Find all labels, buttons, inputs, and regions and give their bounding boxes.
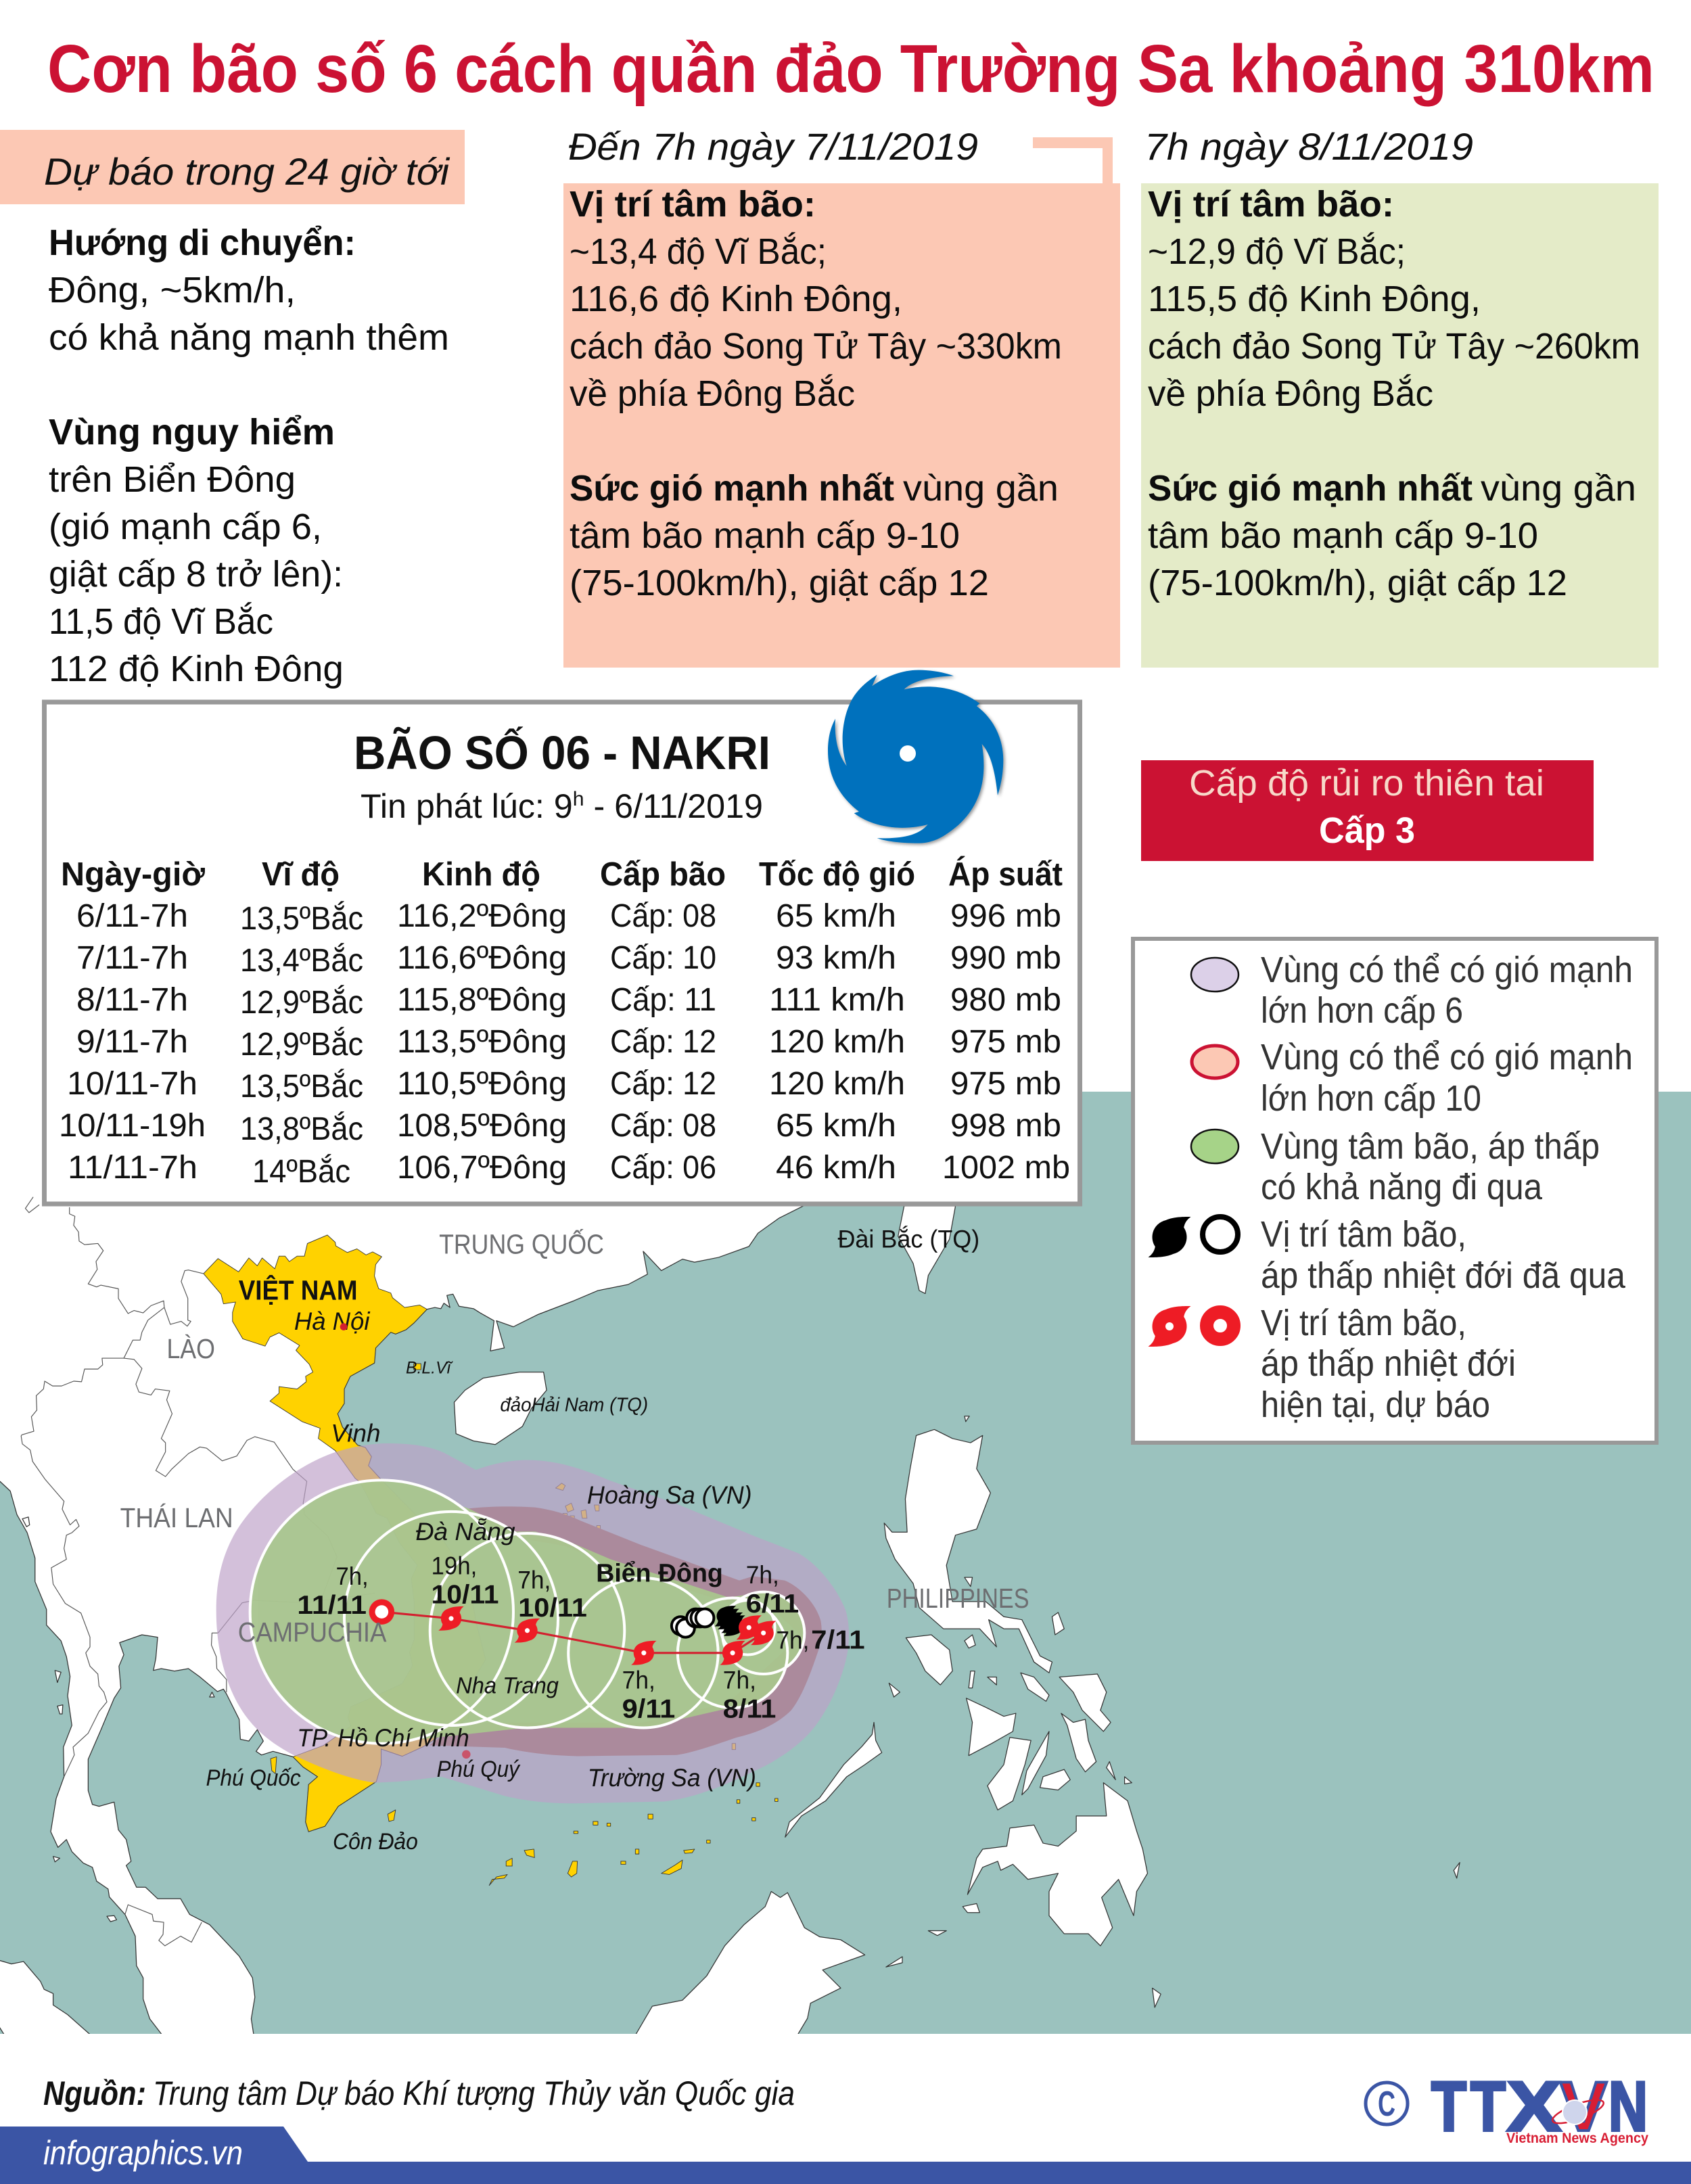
column: wind speed: 46 km/h — [776, 1150, 896, 1186]
past positions — [672, 1606, 745, 1637]
text block: position — [570, 184, 1062, 414]
logo: TTXVN: V — [1560, 2068, 1607, 2146]
column: latitude: 13,5ºBắc — [240, 900, 363, 937]
column: storm level — [610, 898, 716, 1186]
text block: position — [1148, 184, 1640, 414]
legend: current and forecast positions: hiện tại, dự báo — [1261, 1385, 1490, 1425]
map labels: VIỆT NAM — [239, 1274, 358, 1305]
column: date time: 11/11-7h — [68, 1150, 198, 1186]
text block: direction: Đông, ~5km/h, — [49, 270, 296, 310]
column: wind speed — [769, 898, 905, 1186]
column: storm level: Cấp: 08 — [610, 898, 716, 934]
table header: Ngày-giờ — [61, 856, 205, 893]
column: date time: 10/11-7h — [67, 1066, 198, 1102]
panel: forecast 8/11 — [1141, 125, 1659, 668]
land: small islands west — [22, 1517, 214, 1922]
map labels: CAMPUCHIA — [238, 1617, 387, 1648]
text block: position: 116,6 độ Kinh Đông, — [570, 279, 902, 319]
text block: danger zone: 112 độ Kinh Đông — [49, 649, 344, 689]
column: latitude: 13,4ºBắc — [240, 942, 363, 979]
column: longitude: 115,8ºĐông — [397, 982, 567, 1018]
footer band: infographics.vn — [43, 2134, 243, 2172]
panel: forecast summary — [0, 130, 465, 689]
logo: TTXVN — [1366, 2068, 1648, 2146]
table box — [45, 702, 1080, 1204]
legend: current and forecast positions — [1149, 1303, 1516, 1425]
text block: wind — [1148, 468, 1636, 603]
column: wind speed: 111 km/h — [769, 982, 905, 1018]
column: longitude: 108,5ºĐông — [397, 1108, 567, 1144]
country borders — [20, 1196, 307, 1947]
heading: 24 hour forecast: Dự báo trong 24 giờ tới — [44, 150, 450, 193]
column: latitude — [240, 900, 363, 1190]
table subtitle: - 6/11/2019 — [584, 787, 763, 825]
map labels: Trường Sa (VN) — [588, 1763, 756, 1792]
column: storm level: Cấp: 08 — [610, 1108, 716, 1144]
column: pressure: 975 mb — [950, 1024, 1061, 1060]
source note: Trung tâm Dự báo Khí tượng Thủy văn Quốc gia — [153, 2074, 795, 2112]
legend: storm centre zone: có khả năng đi qua — [1261, 1167, 1543, 1207]
text block: wind — [570, 468, 1059, 603]
column: pressure: 996 mb — [950, 898, 1061, 934]
map labels: B.L.Vĩ — [406, 1358, 454, 1377]
logo: TTXVN: T — [1470, 2068, 1506, 2146]
legend: winds above level 6: Vùng có thể có gió mạnh — [1261, 950, 1633, 990]
land: mainland Asia — [0, 1088, 876, 2043]
text block: wind: tâm bão mạnh cấp 9-10 — [570, 515, 960, 556]
map labels: 10/11 — [432, 1580, 499, 1610]
map labels: LÀO — [166, 1333, 215, 1364]
map labels: đảoHải Nam (TQ) — [500, 1395, 648, 1416]
panel: storm data table — [45, 670, 1080, 1204]
column: date time: 9/11-7h — [76, 1024, 188, 1060]
column: longitude: 110,5ºĐông — [397, 1066, 567, 1102]
heading: 24 hour forecast — [0, 130, 465, 204]
column: wind speed: 65 km/h — [776, 898, 896, 934]
logo: TTXVN: T — [1431, 2068, 1466, 2146]
legend: current and forecast positions: Vị trí tâm bão, — [1261, 1303, 1466, 1343]
text block: position: Vị trí tâm bão: — [570, 184, 816, 225]
panel: legend — [1133, 939, 1657, 1443]
legend: winds above level 10: Vùng có thể có gió mạnh — [1261, 1037, 1633, 1077]
map labels: 10/11 — [518, 1593, 587, 1623]
column: date time: 6/11-7h — [76, 898, 188, 934]
logo: TTXVN: Vietnam News Agency — [1506, 2131, 1648, 2146]
map labels: Đà Nẵng — [415, 1517, 515, 1546]
text block: position: 115,5 độ Kinh Đông, — [1148, 279, 1481, 319]
map labels: 11/11 — [297, 1590, 367, 1620]
legend: past positions: áp thấp nhiệt đới đã qua — [1261, 1255, 1626, 1296]
legend: past positions — [1149, 1214, 1626, 1296]
column: pressure: 990 mb — [950, 940, 1061, 976]
land: Viet Nam — [203, 1235, 437, 1832]
text block: position: cách đảo Song Tử Tây ~260km — [1148, 326, 1640, 367]
storm zone: winds above level 6 — [216, 1443, 849, 1803]
text block: danger zone: giật cấp 8 trở lên): — [49, 554, 343, 595]
map labels: 7h, — [335, 1562, 369, 1590]
column: pressure — [942, 898, 1070, 1186]
column: longitude: 116,2ºĐông — [397, 898, 567, 934]
column: wind speed: 120 km/h — [769, 1066, 905, 1102]
panel background — [1141, 183, 1659, 668]
legend: winds above level 10 — [1192, 1037, 1633, 1119]
text block: position: ~13,4 độ Vĩ Bắc; — [570, 231, 827, 272]
map labels: 7h, — [517, 1565, 551, 1594]
table header: Cấp bão — [600, 856, 726, 893]
table header — [61, 856, 1063, 893]
table header: Tốc độ gió — [759, 856, 915, 893]
text block: position: ~12,9 độ Vĩ Bắc; — [1148, 231, 1406, 272]
text block: direction — [49, 223, 449, 358]
storm zone: storm centre corridor — [250, 1479, 804, 1744]
column: pressure: 980 mb — [950, 982, 1061, 1018]
column: storm level: Cấp: 12 — [610, 1066, 716, 1102]
column: latitude: 12,9ºBắc — [240, 984, 363, 1021]
legend box — [1133, 939, 1657, 1443]
callout: disaster risk level: Cấp 3 — [1319, 810, 1415, 851]
heading: 8/11: 7h ngày 8/11/2019 — [1144, 125, 1473, 168]
map labels: Phú Quý — [437, 1757, 521, 1782]
column: latitude: 13,5ºBắc — [240, 1068, 363, 1105]
heading: 7/11: Đến 7h ngày 7/11/2019 — [568, 125, 978, 168]
column: latitude: 14ºBắc — [252, 1153, 350, 1190]
legend: past positions: Vị trí tâm bão, — [1261, 1214, 1466, 1255]
map labels — [120, 1225, 1029, 1855]
column: date time — [59, 898, 206, 1186]
map labels: 6/11 — [746, 1589, 799, 1619]
panel background — [563, 183, 1120, 668]
column: wind speed: 65 km/h — [776, 1108, 896, 1144]
column: longitude — [397, 898, 567, 1186]
text block: danger zone: 11,5 độ Vĩ Bắc — [49, 601, 273, 642]
text block: danger zone: (gió mạnh cấp 6, — [49, 507, 322, 547]
column: longitude: 113,5ºĐông — [397, 1024, 567, 1060]
text block: danger zone — [49, 412, 344, 689]
text block: danger zone: Vùng nguy hiểm — [49, 412, 335, 452]
text block: wind: (75-100km/h), giật cấp 12 — [570, 563, 989, 603]
table subtitle: Tin phát lúc: 9 — [361, 787, 572, 825]
map labels: 19h, — [432, 1552, 477, 1580]
column: date time: 10/11-19h — [59, 1108, 206, 1144]
text block: danger zone: trên Biển Đông — [49, 459, 296, 500]
column: storm level: Cấp: 11 — [610, 982, 716, 1018]
column: pressure: 975 mb — [950, 1066, 1061, 1102]
land: Taiwan — [898, 1206, 956, 1294]
storm zone: winds above level 10 — [430, 1506, 822, 1756]
column: longitude: 116,6ºĐông — [397, 940, 567, 976]
column: date time: 8/11-7h — [76, 982, 188, 1018]
map land and storm, traced coordinates — [0, 1088, 1460, 2043]
footer band — [0, 2127, 1691, 2184]
table header: Kinh độ — [422, 856, 540, 893]
land: Borneo — [631, 1891, 865, 2043]
column: storm level: Cấp: 12 — [610, 1024, 716, 1060]
table header: Vĩ độ — [262, 856, 340, 893]
storm track line — [381, 1612, 764, 1653]
column: longitude: 106,7ºĐông — [397, 1150, 567, 1186]
text block: position: về phía Đông Bắc — [1148, 373, 1433, 414]
column: latitude: 13,8ºBắc — [240, 1111, 363, 1147]
ocean — [0, 1092, 1691, 2034]
legend: current and forecast positions: áp thấp nhiệt đới — [1261, 1343, 1516, 1384]
map labels: THÁI LAN — [120, 1502, 233, 1533]
map labels: 7h, — [622, 1665, 655, 1694]
logo: TTXVN: C — [1378, 2085, 1395, 2124]
islands — [271, 1364, 778, 1886]
text block: position: Vị trí tâm bão: — [1148, 184, 1394, 225]
logo: TTXVN: N — [1608, 2068, 1648, 2146]
map labels: 7h, — [723, 1665, 756, 1694]
text block: position: về phía Đông Bắc — [570, 373, 855, 414]
text block: direction: Hướng di chuyển: — [49, 223, 356, 263]
table header: Áp suất — [948, 856, 1063, 893]
map labels: TP. Hồ Chí Minh — [297, 1723, 469, 1752]
column: wind speed: 120 km/h — [769, 1024, 905, 1060]
column: storm level: Cấp: 06 — [610, 1150, 716, 1186]
source note: Nguồn: — [43, 2074, 146, 2112]
map labels: Hà Nội — [294, 1307, 371, 1335]
column: date time: 7/11-7h — [76, 940, 188, 976]
map labels: Biển Đông — [596, 1558, 723, 1587]
text block: wind: tâm bão mạnh cấp 9-10 — [1148, 515, 1538, 556]
map labels: TRUNG QUỐC — [439, 1229, 604, 1260]
table title: BÃO SỐ 06 - NAKRI — [354, 726, 770, 779]
map labels: 8/11 — [723, 1694, 776, 1723]
icon: cyclone — [828, 670, 1003, 843]
connector arrow — [1033, 137, 1113, 183]
legend: winds above level 6: lớn hơn cấp 6 — [1261, 990, 1463, 1031]
land: Sumatra — [0, 1960, 90, 2034]
map labels: PHILIPPINES — [887, 1583, 1029, 1614]
legend: storm centre zone — [1191, 1126, 1600, 1207]
text block: position: cách đảo Song Tử Tây ~330km — [570, 326, 1062, 367]
land: Hainan — [454, 1372, 547, 1445]
text block: direction: có khả năng mạnh thêm — [49, 317, 449, 358]
map — [0, 1088, 1691, 2043]
text block: wind: Sức gió mạnh nhất — [570, 468, 894, 509]
column: pressure: 1002 mb — [942, 1150, 1070, 1186]
map labels: 7/11 — [811, 1625, 865, 1655]
map labels: Đài Bắc (TQ) — [837, 1225, 979, 1253]
map labels: Phú Quốc — [206, 1765, 301, 1791]
map labels: 7h, — [746, 1560, 779, 1589]
land: Philippines — [785, 1416, 1460, 2007]
column: pressure: 998 mb — [950, 1108, 1061, 1144]
panel: forecast 7/11 — [563, 125, 1120, 668]
callout: disaster risk level: Cấp độ rủi ro thiên tai — [1189, 763, 1544, 804]
column: storm level: Cấp: 10 — [610, 940, 716, 976]
text block: wind: (75-100km/h), giật cấp 12 — [1148, 563, 1567, 603]
map labels: Hoàng Sa (VN) — [587, 1481, 752, 1509]
map labels: 9/11 — [622, 1694, 675, 1723]
forecast radius circles — [250, 1480, 804, 1744]
map labels: Côn Đảo — [333, 1829, 418, 1855]
column: wind speed: 93 km/h — [776, 940, 896, 976]
logo: TTXVN: X — [1507, 2068, 1561, 2146]
table subtitle: h — [573, 788, 584, 810]
legend: winds above level 10: lớn hơn cấp 10 — [1261, 1078, 1481, 1119]
legend: winds above level 6 — [1191, 950, 1633, 1031]
text block: wind: vùng gần — [1481, 468, 1636, 509]
legend: storm centre zone: Vùng tâm bão, áp thấp — [1261, 1126, 1600, 1167]
map labels: 7h, — [776, 1626, 809, 1654]
text block: wind: Sức gió mạnh nhất — [1148, 468, 1473, 509]
forecast position markers — [369, 1599, 776, 1665]
map labels: Vinh — [331, 1418, 381, 1447]
column: latitude: 12,9ºBắc — [240, 1026, 363, 1063]
callout: disaster risk level — [1141, 760, 1594, 861]
text block: wind: vùng gần — [903, 468, 1059, 509]
map labels: Nha Trang — [456, 1673, 559, 1699]
